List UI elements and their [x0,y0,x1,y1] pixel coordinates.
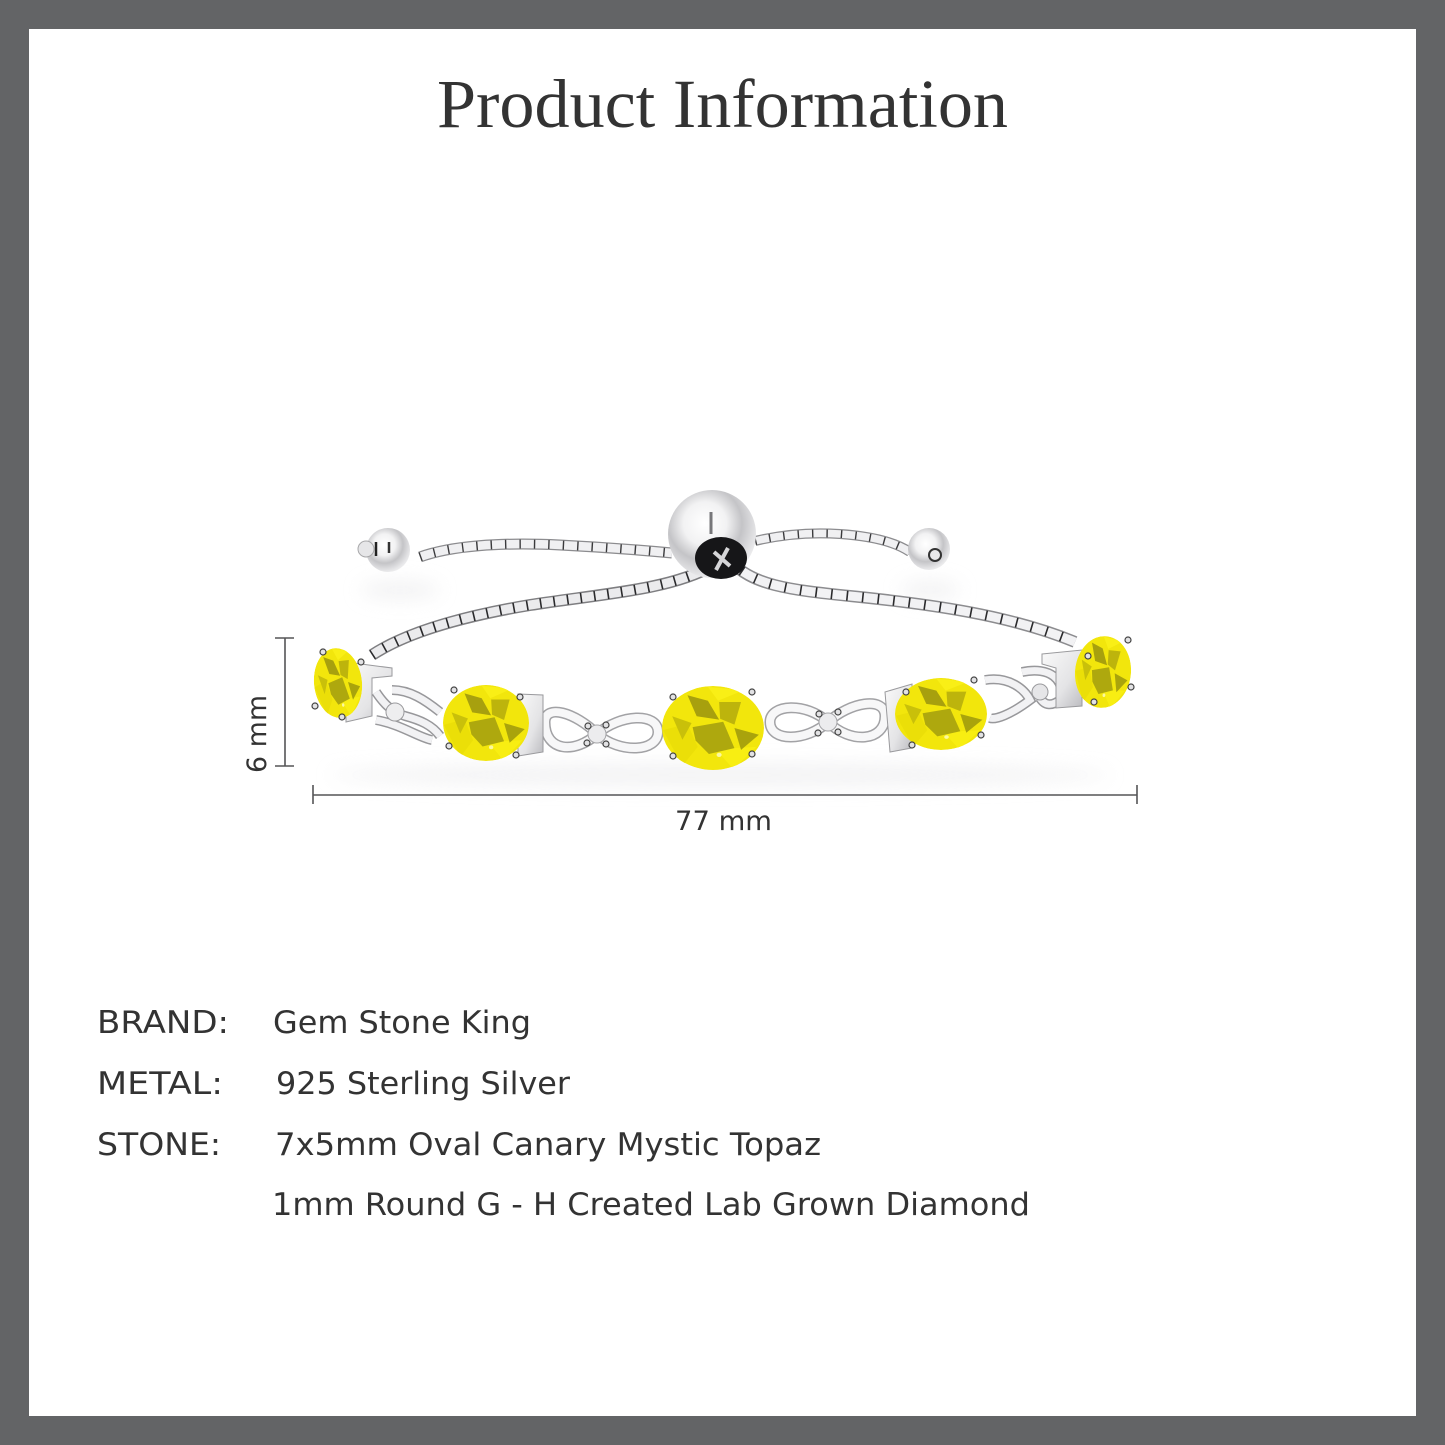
stone setting: second [518,694,543,756]
yellow stone 3 [662,686,764,770]
diamond: second [584,722,609,747]
yellow stone 2 [443,685,529,761]
stone setting: first [346,662,392,722]
diamond: first [386,703,404,721]
infinity link: second [545,712,658,748]
yellow stone 4 [895,677,987,750]
stone setting: fourth [885,684,912,752]
lower left chain [372,566,712,655]
infinity link: fourth [985,671,1061,718]
height dimension line [275,638,294,766]
infinity link: first [376,690,440,740]
title: Product Information [437,66,1008,142]
upper right chain [755,533,910,552]
height label: 6 mm [242,695,273,773]
brand value: Gem Stone King [273,1005,531,1041]
infinity link: third [770,704,885,737]
slider bead [668,490,756,579]
stone label: STONE: [97,1127,221,1163]
diamond: third [815,709,841,736]
left end bead [358,528,410,572]
metal value: 925 Sterling Silver [276,1066,570,1102]
brand label: BRAND: [97,1005,229,1041]
soft reflection under bracelet [330,580,1110,787]
specifications [97,1005,1030,1223]
yellow stone 5 [1071,633,1135,711]
stone setting: fifth [1042,650,1082,708]
width dimension line [313,785,1137,804]
stone value: 7x5mm Oval Canary Mystic Topaz [275,1127,821,1163]
bracelet illustration [310,490,1135,787]
right end bead [908,528,950,570]
lower right chain [730,560,1075,642]
second stone value: 1mm Round G - H Created Lab Grown Diamond [272,1187,1030,1223]
width label: 77 mm [675,806,772,837]
upper left chain [420,544,672,557]
metal label: METAL: [97,1066,223,1102]
diamond: fourth [1032,684,1048,700]
yellow stone 1 [310,646,366,720]
